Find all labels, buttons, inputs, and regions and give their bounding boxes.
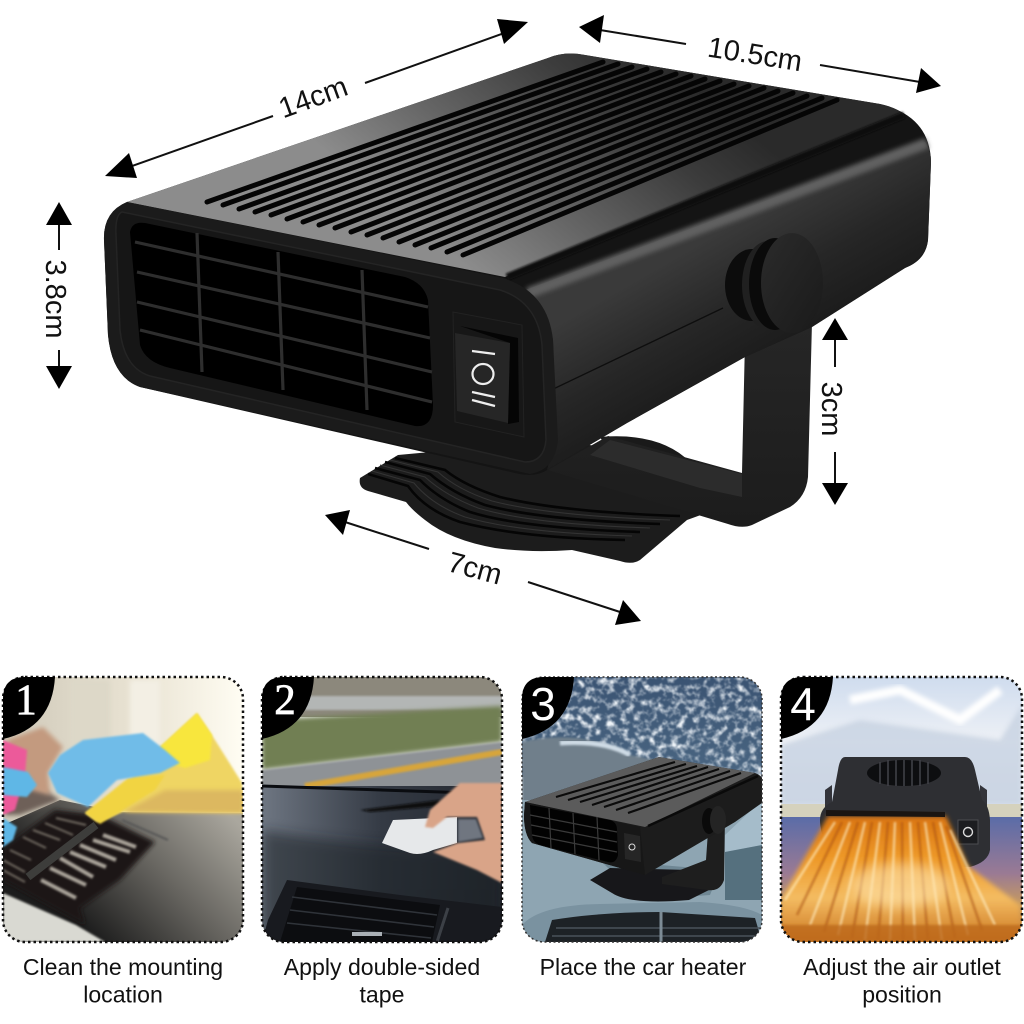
caption step 2: tape xyxy=(360,982,404,1008)
air vent xyxy=(262,880,502,942)
caption step 4: position xyxy=(862,982,942,1008)
photo: cleaning dashboard vent xyxy=(3,677,243,942)
front face xyxy=(104,202,558,474)
top edge shadow and highlight xyxy=(507,115,904,277)
dotted border xyxy=(262,677,502,942)
mounting base plate xyxy=(360,436,742,563)
bracket arm xyxy=(548,322,812,527)
dimension: 3.8cm xyxy=(39,202,72,389)
dimension: 10.5cm: 10.5cm xyxy=(705,32,804,78)
caption step 1: location xyxy=(83,982,163,1008)
number badge 1: 1 xyxy=(15,677,37,724)
caption step 2: Apply double-sided xyxy=(284,954,480,980)
warm air rays xyxy=(781,810,1022,942)
dimension: 7cm xyxy=(325,510,641,625)
panel: step 4 adjust the air outlet position xyxy=(781,677,1022,942)
front grille xyxy=(130,223,433,426)
number badge 3: 3 xyxy=(530,678,556,730)
border xyxy=(522,677,762,942)
mini heater xyxy=(524,757,766,901)
heater body xyxy=(104,54,931,475)
dimension: 14cm: 14cm xyxy=(275,71,352,125)
body silhouette and side face xyxy=(104,54,931,475)
number badge 2 xyxy=(262,677,314,739)
number badge 3 xyxy=(522,677,574,739)
number badge 4 xyxy=(781,677,833,739)
number badge 1 xyxy=(3,677,55,739)
rocker switch xyxy=(453,312,524,437)
pink spray bottle xyxy=(3,740,27,815)
number badge 4: 4 xyxy=(790,678,816,730)
panel: step 2 apply double-sided tape xyxy=(262,677,502,942)
dotted border xyxy=(781,677,1022,942)
forearm xyxy=(7,727,63,795)
photo: tape on dashboard xyxy=(262,677,502,942)
photo: heater blowing warm air xyxy=(781,677,1022,942)
dimension: 7cm: 7cm xyxy=(444,546,505,592)
blue glove xyxy=(48,733,180,807)
heater product illustration xyxy=(104,54,931,563)
caption step 4: Adjust the air outlet xyxy=(803,954,1001,980)
top ventilation ribs xyxy=(207,62,837,255)
dimension: 3cm xyxy=(815,318,848,505)
dimension: 3.8cm: 3.8cm xyxy=(39,260,71,338)
caption step 1: Clean the mounting xyxy=(23,954,223,980)
vent slats xyxy=(3,810,168,925)
panel: step 3 place the car heater xyxy=(522,677,766,942)
pivot knob xyxy=(725,233,823,333)
top surface xyxy=(127,54,904,277)
dimension: 3cm: 3cm xyxy=(815,382,847,436)
caption step 3: Place the car heater xyxy=(540,954,747,980)
dimension: 14cm xyxy=(105,19,528,178)
photo: heater on dashboard, snowy road xyxy=(522,677,766,942)
panel: step 1 clean the mounting location xyxy=(3,677,243,942)
dimension: 10.5cm xyxy=(579,15,941,93)
number badge 2: 2 xyxy=(274,677,296,724)
dashboard and vent xyxy=(522,902,762,942)
double-sided tape xyxy=(382,817,457,854)
dotted border xyxy=(3,677,243,942)
hand xyxy=(425,783,502,883)
heater rear view xyxy=(820,757,990,867)
yellow cloth xyxy=(85,713,243,822)
